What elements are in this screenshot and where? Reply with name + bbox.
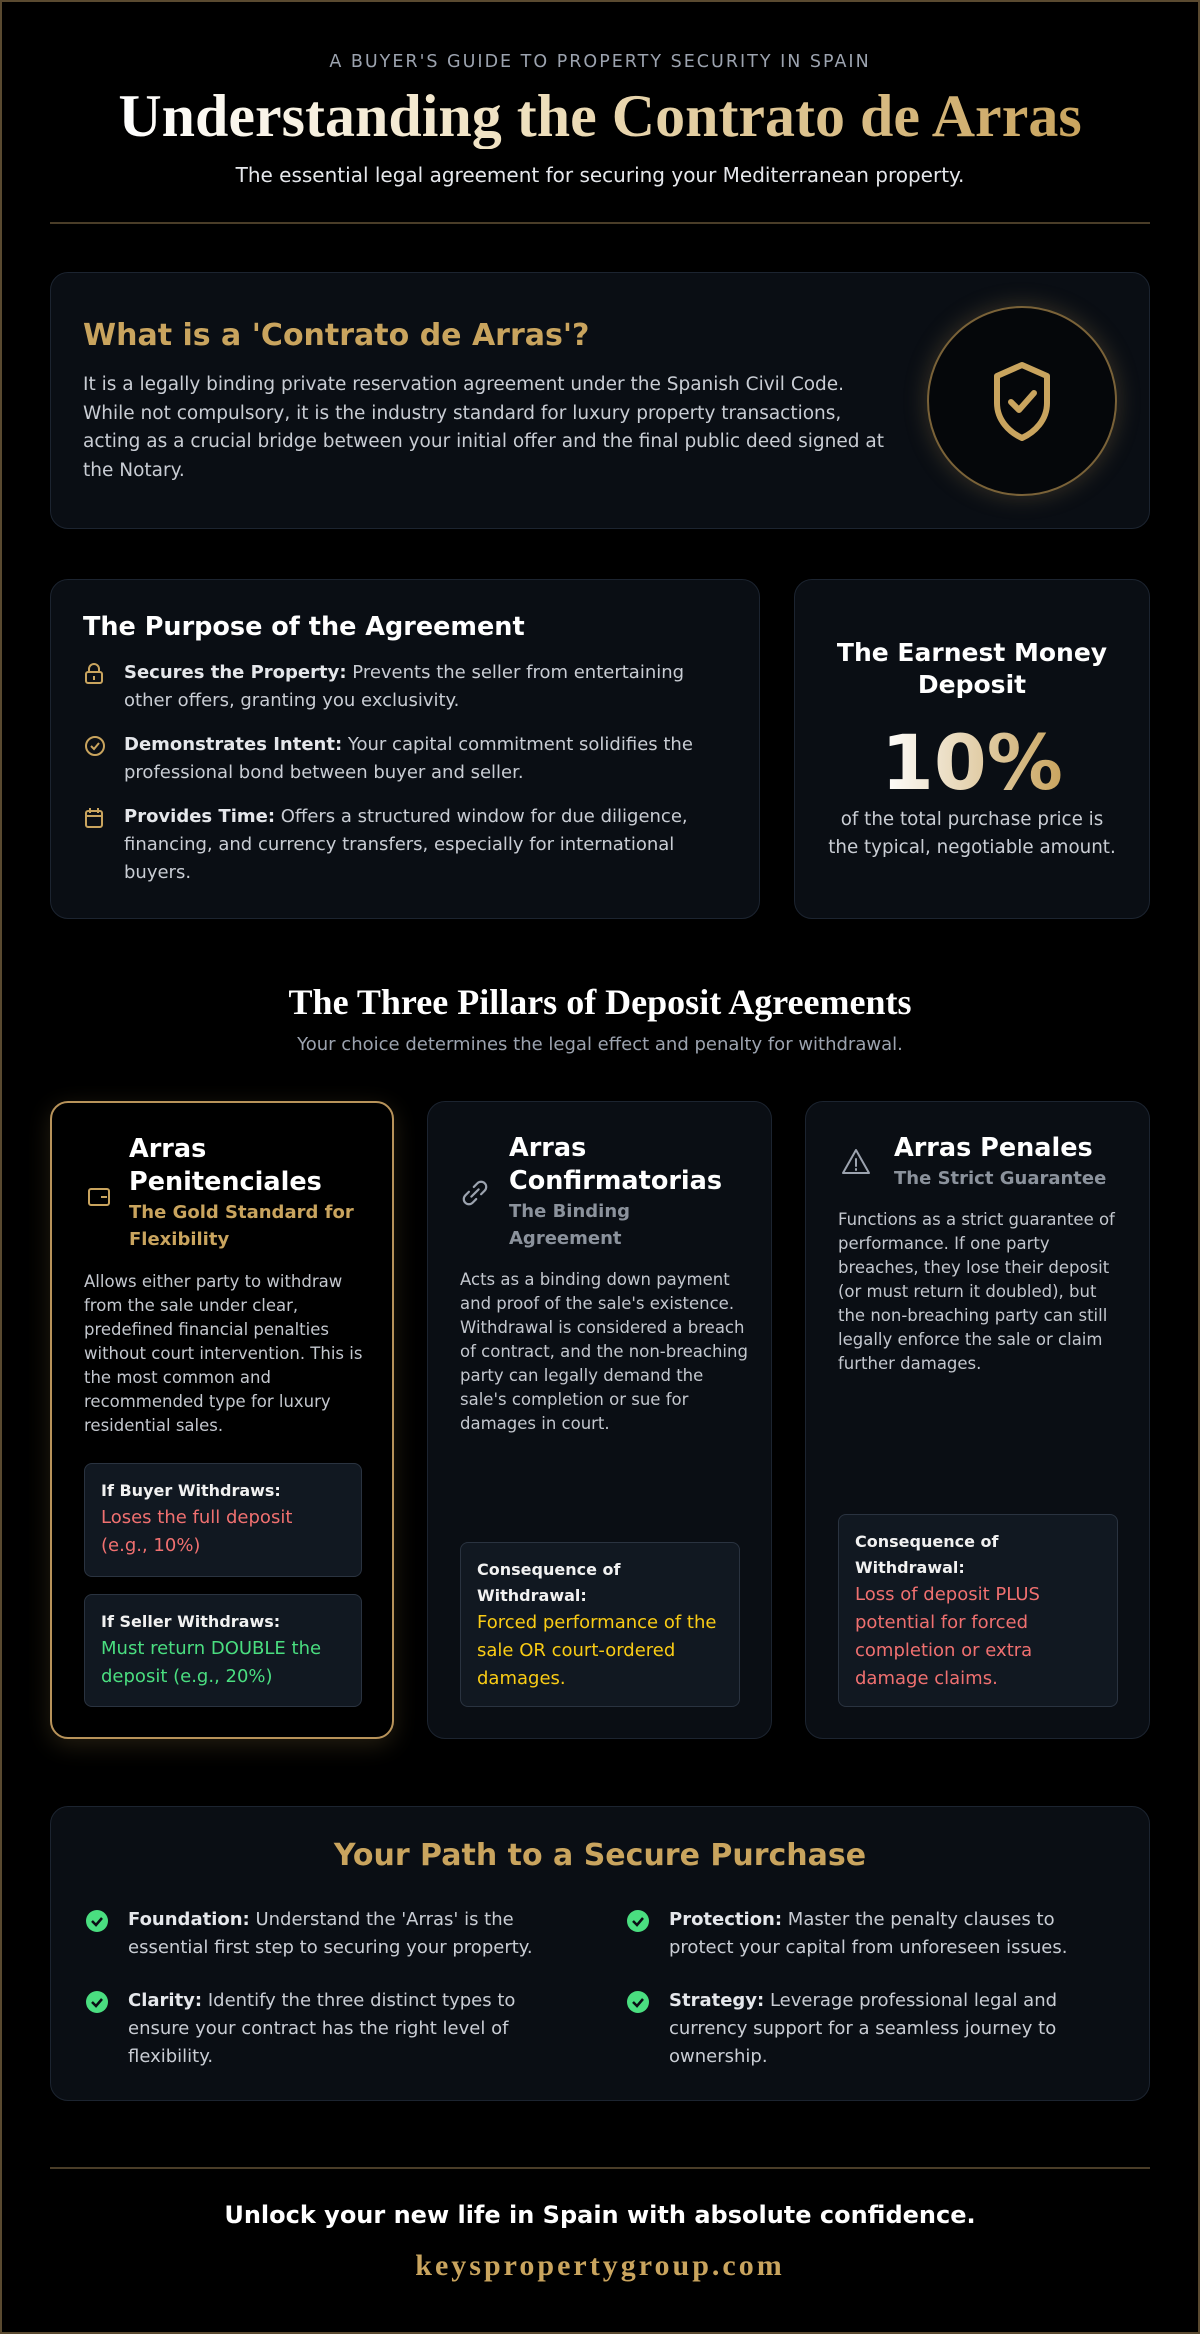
heading: three pillars: The Three Pillars of Deposit Agreements (289, 982, 911, 1022)
stat: 10%: 10% (881, 718, 1063, 807)
heading: confirmatorias: Arras Confirmatorias (509, 1133, 722, 1196)
item: strategy: Strategy: Leverage professional legal and currency support for a seamless journey to ownership. (669, 1990, 1057, 2067)
heading: confirmatorias (509, 1133, 722, 1249)
box: consequence: Withdrawal: (855, 1558, 965, 1577)
text: confirmatorias: damages in court. (460, 1414, 610, 1433)
footer tagline: Unlock your new life in Spain with absolute confidence. (224, 2201, 976, 2229)
text: confirmatorias: of contract, and the non-breaching (460, 1342, 748, 1361)
heading: deposit: The Earnest Money Deposit (837, 638, 1107, 699)
panel: confirmatorias (427, 1101, 772, 1739)
item: foundation: Foundation: Understand the 'Arras' is the essential first step to securing your property. (128, 1909, 533, 1958)
box: buyer withdraws: (e.g., 10%) (101, 1535, 200, 1556)
text: deposit note: of the total purchase price is (841, 809, 1103, 830)
list item: secures: Secures the Property: Prevents the seller from entertaining other offers, granting you exclusivity. (124, 662, 684, 711)
list item: time: Provides Time: Offers a structured window for due diligence, financing, and currency transfers, especially for international buyers. (124, 806, 688, 883)
box: consequence: potential for forced (855, 1612, 1028, 1633)
box: consequence: damage claims. (855, 1668, 998, 1689)
heading: purpose: The Purpose of the Agreement (83, 612, 525, 642)
icon: wallet (88, 1188, 110, 1206)
box: consequence: sale OR court-ordered (477, 1640, 675, 1661)
box: seller withdraws: If Seller Withdraws: (101, 1612, 280, 1631)
box: consequence (838, 1514, 1118, 1707)
list item: intent: Demonstrates Intent: Your capital commitment solidifies the professional bond between buyer and seller. (124, 734, 693, 783)
heading: penales: Arras Penales (894, 1133, 1093, 1163)
panel: path (50, 1806, 1150, 2101)
heading: confirmatorias: The Binding (509, 1201, 630, 1222)
box: consequence: Forced performance of the (477, 1612, 716, 1633)
box: consequence: Consequence of (477, 1560, 620, 1579)
box: buyer withdraws: Loses the full deposit (101, 1507, 292, 1528)
footer website: keyspropertygroup.com (415, 2249, 785, 2282)
panel: penitenciales (50, 1101, 394, 1739)
panel: penales (805, 1101, 1150, 1739)
icon: link (462, 1180, 488, 1206)
box: consequence: Loss of deposit PLUS (855, 1584, 1040, 1605)
heading: penales (894, 1133, 1106, 1189)
subtitle: The essential legal agreement for securing your Mediterranean property. (236, 163, 964, 187)
box: consequence: completion or extra (855, 1640, 1032, 1661)
icon: warning (842, 1149, 870, 1174)
panel: deposit (794, 579, 1150, 919)
box: seller withdraws: Must return DOUBLE the (101, 1638, 321, 1659)
text: confirmatorias: sale's completion or sue for (460, 1390, 688, 1409)
text: confirmatorias: party can legally demand the (460, 1366, 703, 1385)
panel: what is (50, 272, 1150, 529)
text: penitenciales: Allows either party to withdraw from the sale under clear, predefined financial penalties without court intervention. This is the most common and recommended type for luxury residential sales. (84, 1272, 362, 1435)
heading: penitenciales: Arras Penitenciales (129, 1134, 322, 1197)
text block: definition: While not compulsory, it is the industry standard for luxury property transactions, (83, 402, 841, 424)
heading: what is: What is a 'Contrato de Arras'? (83, 318, 589, 353)
box: seller withdraws: deposit (e.g., 20%) (101, 1666, 273, 1687)
eyebrow: A BUYER'S GUIDE TO PROPERTY SECURITY IN SPAIN (329, 52, 871, 72)
box: consequence: Withdrawal: (477, 1586, 587, 1605)
text: confirmatorias (460, 1270, 748, 1433)
heading: path: Your Path to a Secure Purchase (334, 1838, 866, 1873)
box: consequence: Consequence of (855, 1532, 998, 1551)
box: buyer withdraws (84, 1463, 362, 1577)
text block: definition: acting as a crucial bridge between your initial offer and the final public deed signed at (83, 431, 884, 452)
icon: shield (927, 306, 1117, 496)
heading: penales: The Strict Guarantee (894, 1168, 1106, 1189)
text: confirmatorias: Acts as a binding down payment (460, 1270, 730, 1289)
text: confirmatorias: and proof of the sale's existence. (460, 1294, 734, 1313)
heading: confirmatorias: Agreement (509, 1228, 622, 1249)
panel: purpose (50, 579, 760, 919)
text block: definition: It is a legally binding private reservation agreement under the Spanish Civil Code. (83, 374, 844, 395)
text block: definition (83, 374, 884, 480)
item: clarity: Clarity: Identify the three distinct types to ensure your contract has the right level of flexibility. (128, 1990, 515, 2067)
box: buyer withdraws: If Buyer Withdraws: (101, 1481, 281, 1500)
box: seller withdraws (84, 1594, 362, 1707)
subheading: pillars: Your choice determines the legal effect and penalty for withdrawal. (297, 1034, 903, 1055)
heading: penitenciales: The Gold Standard for Flexibility (129, 1202, 354, 1250)
text: confirmatorias: Withdrawal is considered a breach (460, 1318, 744, 1337)
text: penales: Functions as a strict guarantee of performance. If one party breaches, they lose their deposit (or must return it doubled), but the non-breaching party can still legally enforce the sale or claim further damages. (838, 1210, 1115, 1373)
text block: definition: the Notary. (83, 460, 185, 480)
heading: penitenciales (129, 1134, 354, 1250)
box: consequence (460, 1542, 740, 1707)
text: deposit note (828, 809, 1116, 858)
title: Understanding the Contrato de Arras (118, 83, 1082, 149)
box: consequence: damages. (477, 1668, 566, 1689)
text: deposit note: the typical, negotiable amount. (828, 837, 1116, 858)
item: protection: Protection: Master the penalty clauses to protect your capital from unforeseen issues. (669, 1909, 1067, 1958)
